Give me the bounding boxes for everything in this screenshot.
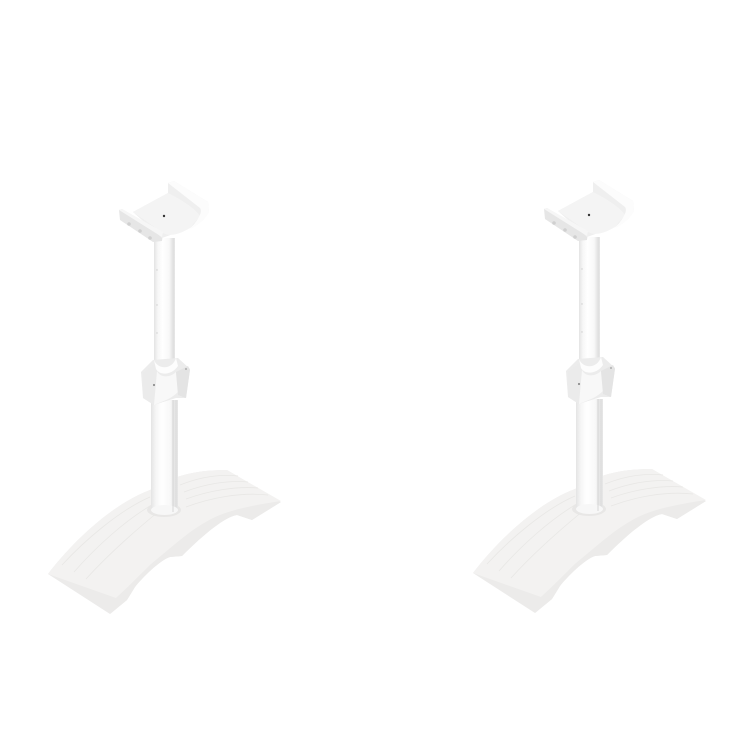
- stand: left: [48, 181, 281, 614]
- stand: right: [473, 180, 706, 613]
